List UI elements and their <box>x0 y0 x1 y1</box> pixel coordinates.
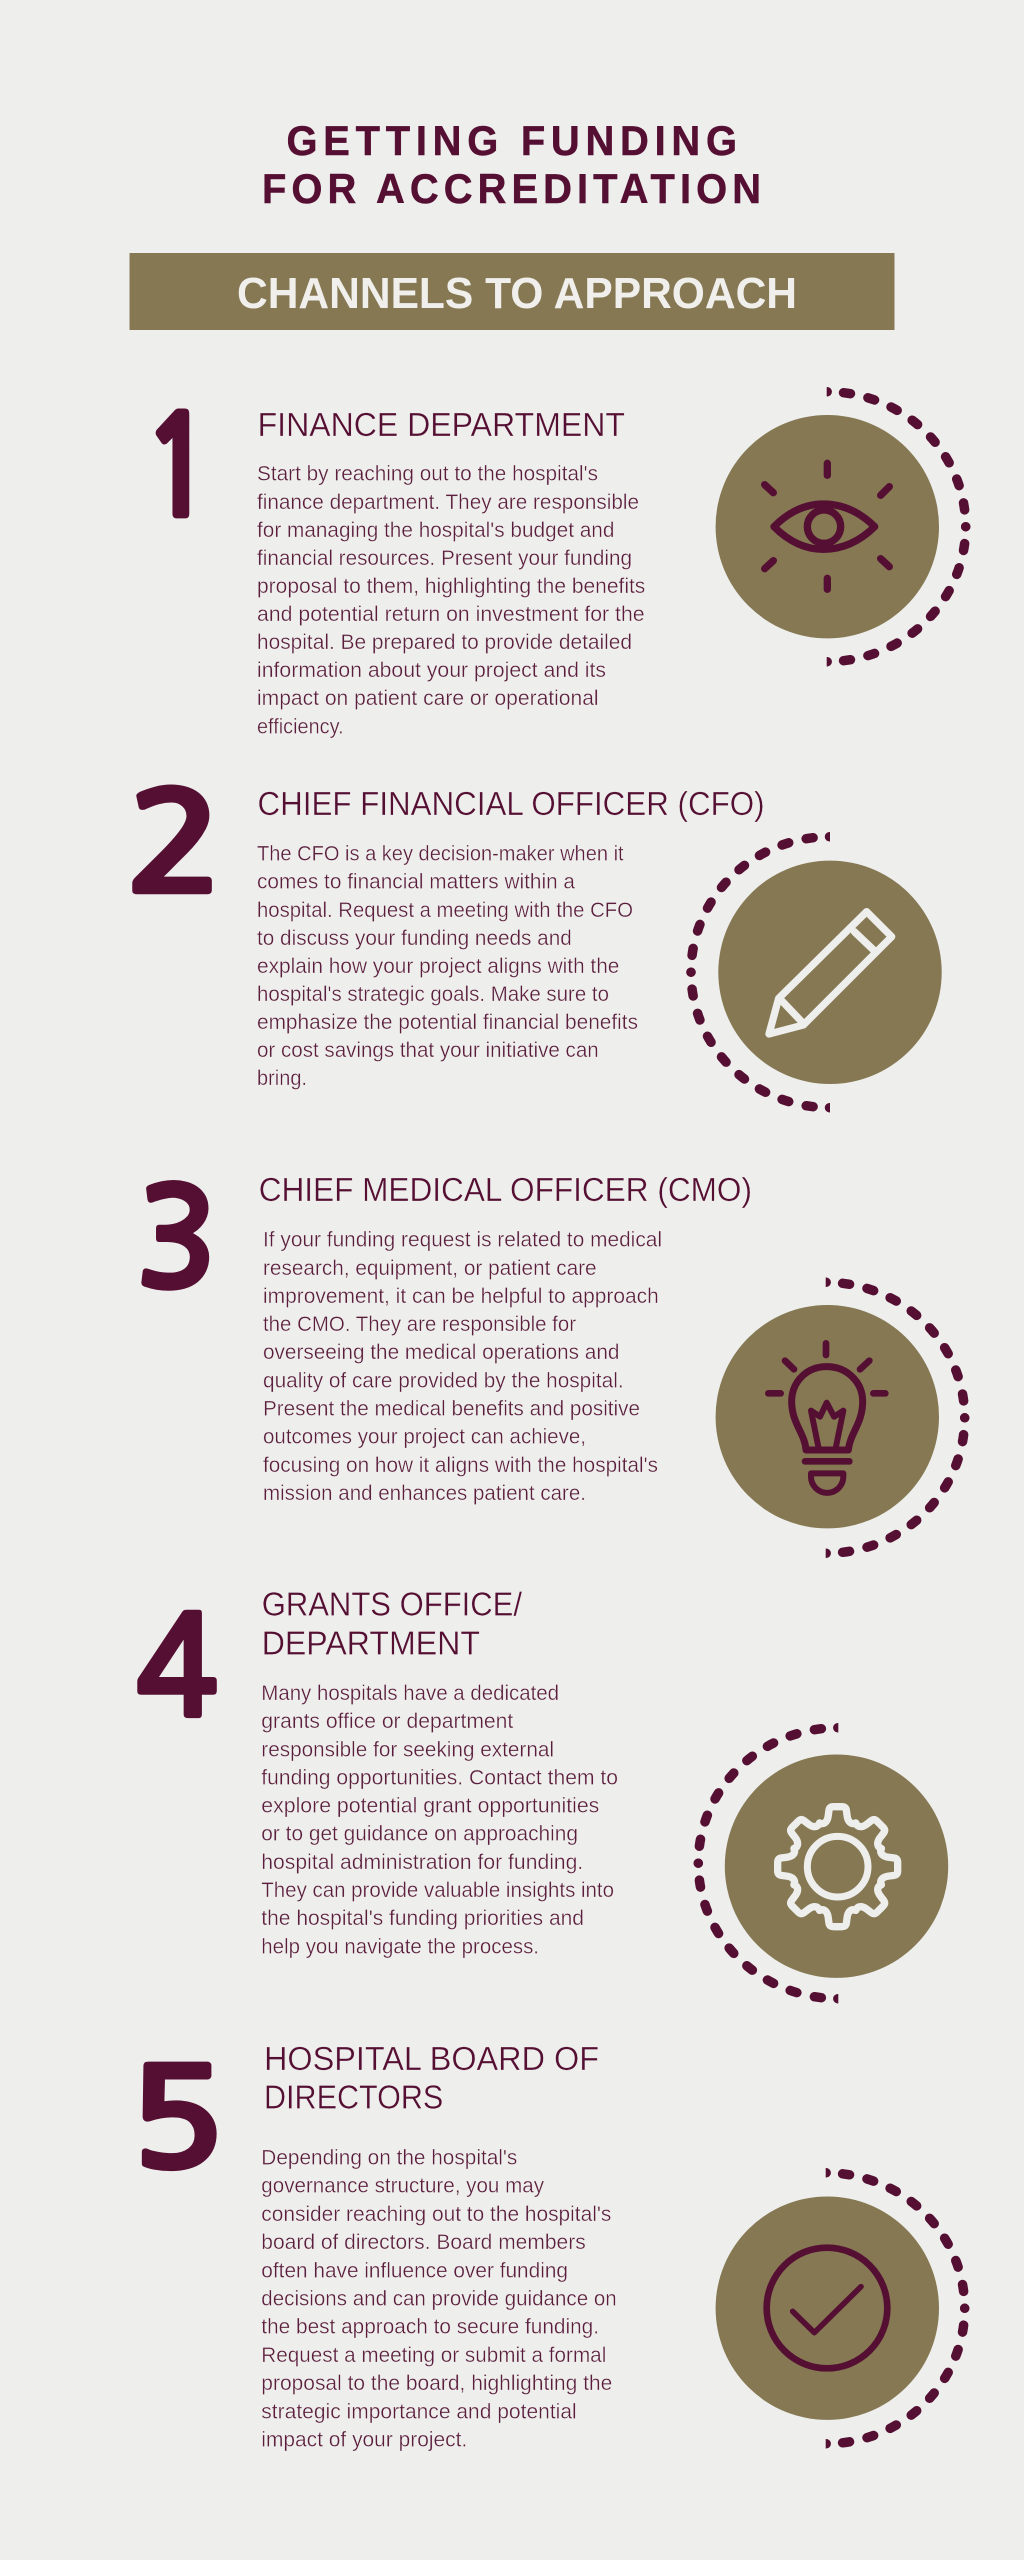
text block: hospital board of directors: the best approach to secure funding. <box>261 2316 599 2339</box>
text block: finance department: and potential return on investment for the <box>257 603 645 626</box>
icon: eye in circle <box>716 392 966 662</box>
text block: grants office <box>261 1682 618 1958</box>
text block: chief financial officer: bring. <box>257 1067 307 1090</box>
text block: finance department: for managing the hospital's budget and <box>257 519 614 542</box>
title: FOR ACCREDITATION <box>262 165 761 212</box>
text block: hospital board of directors: governance structure, you may <box>261 2174 544 2198</box>
text block: chief medical officer: the CMO. They are responsible for <box>263 1313 576 1336</box>
text block: grants office: funding opportunities. Contact them to <box>261 1766 618 1789</box>
number 4: 4 <box>135 1600 219 1737</box>
text block: chief financial officer: emphasize the potential financial benefits <box>257 1011 638 1034</box>
text block: chief financial officer <box>257 843 638 1090</box>
banner: channels to approach: CHANNELS TO APPROACH <box>237 269 797 318</box>
icon: light bulb in circle <box>716 1282 965 1553</box>
banner: channels to approach <box>130 253 894 330</box>
heading: hospital board of directors: HOSPITAL BOARD OF <box>264 2040 599 2077</box>
number 2: 2 <box>125 776 225 913</box>
text block: chief medical officer: Present the medical benefits and positive <box>263 1397 640 1420</box>
text block: chief medical officer: mission and enhances patient care. <box>263 1482 586 1505</box>
text block: chief financial officer: explain how your project aligns with the <box>257 955 619 978</box>
text block: chief financial officer: comes to financial matters within a <box>257 871 575 894</box>
text block: grants office: responsible for seeking external <box>261 1738 554 1761</box>
text block: chief medical officer: overseeing the medical operations and <box>263 1341 619 1364</box>
icon: pencil in circle <box>691 837 942 1108</box>
text block: chief financial officer: hospital's strategic goals. Make sure to <box>257 983 609 1006</box>
text block: chief medical officer: quality of care provided by the hospital. <box>263 1369 624 1392</box>
panel: grants office <box>135 1586 948 1999</box>
title <box>262 117 761 212</box>
text block: finance department: efficiency. <box>257 715 344 738</box>
text block: hospital board of directors: board of directors. Board members <box>261 2231 586 2254</box>
text block: finance department: information about your project and its <box>257 659 606 682</box>
text block: chief medical officer: focusing on how it aligns with the hospital's <box>263 1454 658 1477</box>
text block: hospital board of directors: impact of your project. <box>261 2429 467 2452</box>
text block: hospital board of directors <box>261 2146 617 2452</box>
text block: grants office: Many hospitals have a dedicated <box>261 1682 559 1705</box>
icon: gear in circle <box>698 1728 948 1999</box>
text block: grants office: grants office or department <box>261 1710 513 1733</box>
heading: chief medical officer: CHIEF MEDICAL OFFICER (CMO) <box>259 1171 752 1208</box>
text block: finance department: finance department. They are responsible <box>257 491 639 514</box>
panel: chief medical officer <box>135 1171 965 1553</box>
text block: hospital board of directors: often have influence over funding <box>261 2259 568 2282</box>
text block: chief financial officer: The CFO is a key decision-maker when it <box>257 843 624 866</box>
number 1: 1 <box>143 400 214 537</box>
text block: chief financial officer: or cost savings that your initiative can <box>257 1039 599 1062</box>
text block: finance department: proposal to them, highlighting the benefits <box>257 575 645 598</box>
heading: hospital board of directors <box>264 2040 599 2116</box>
text block: grants office: the hospital's funding priorities and <box>261 1907 584 1930</box>
text block: finance department <box>257 463 645 738</box>
text block: chief medical officer: research, equipment, or patient care <box>263 1257 597 1280</box>
panel: hospital board of directors <box>128 2040 965 2452</box>
text block: chief financial officer: hospital. Request a meeting with the CFO <box>257 899 633 922</box>
text block: chief medical officer: If your funding request is related to medical <box>263 1229 662 1252</box>
text block: hospital board of directors: strategic importance and potential <box>261 2400 577 2424</box>
text block: grants office: or to get guidance on approaching <box>261 1823 578 1846</box>
text block: grants office: hospital administration for funding. <box>261 1851 583 1874</box>
text block: hospital board of directors: Request a meeting or submit a formal <box>261 2344 606 2367</box>
text block: chief financial officer: to discuss your funding needs and <box>257 927 572 950</box>
text block: chief medical officer: improvement, it can be helpful to approach <box>263 1285 659 1308</box>
text block: grants office: help you navigate the process. <box>261 1935 539 1958</box>
text block: finance department: Start by reaching out to the hospital's <box>257 463 598 486</box>
title: GETTING FUNDING <box>286 117 737 164</box>
infographic canvas <box>130 126 970 2451</box>
heading: chief financial officer: CHIEF FINANCIAL OFFICER (CFO) <box>258 785 764 822</box>
text block: hospital board of directors: decisions and can provide guidance on <box>261 2288 617 2310</box>
heading: grants office: DEPARTMENT <box>262 1624 480 1661</box>
number 3: 3 <box>135 1172 219 1308</box>
text block: finance department: financial resources. Present your funding <box>257 547 632 570</box>
text block: chief medical officer: outcomes your project can achieve, <box>263 1426 586 1449</box>
text block: hospital board of directors: Depending on the hospital's <box>261 2146 517 2169</box>
text block: hospital board of directors: proposal to the board, highlighting the <box>261 2372 612 2395</box>
text block: hospital board of directors: consider reaching out to the hospital's <box>261 2203 611 2226</box>
heading: hospital board of directors: DIRECTORS <box>264 2079 443 2116</box>
heading: grants office: GRANTS OFFICE/ <box>262 1586 523 1623</box>
text block: finance department: impact on patient care or operational <box>257 687 599 710</box>
icon: check mark in circle <box>716 2173 965 2444</box>
number 5: 5 <box>128 2053 225 2189</box>
heading: finance department: FINANCE DEPARTMENT <box>258 406 625 443</box>
panel: chief financial officer <box>125 776 942 1108</box>
heading: grants office <box>262 1586 523 1661</box>
text block: grants office: They can provide valuable insights into <box>261 1879 614 1902</box>
text block: grants office: explore potential grant opportunities <box>261 1795 599 1818</box>
text block: finance department: hospital. Be prepared to provide detailed <box>257 631 632 654</box>
text block: chief medical officer <box>263 1229 662 1505</box>
panel: finance department <box>143 392 966 738</box>
